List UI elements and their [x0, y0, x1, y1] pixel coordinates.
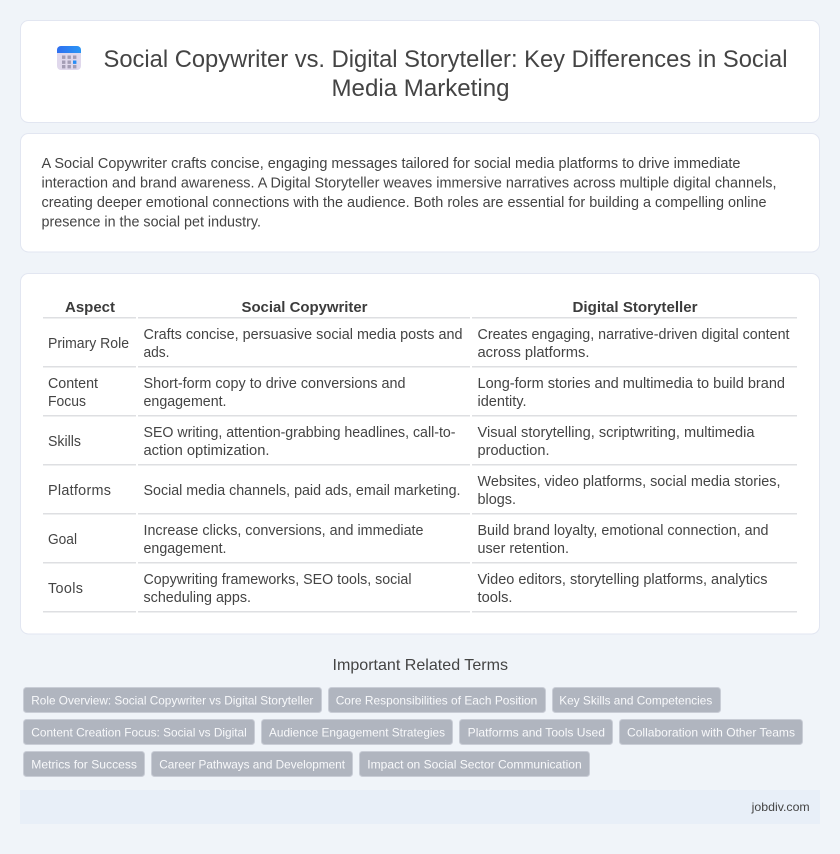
row: goal: Goal [48, 532, 77, 548]
row: primary role [43, 327, 797, 368]
title: Media Marketing [332, 75, 510, 102]
intro text: presence in the social pet industry. [42, 214, 261, 230]
row: goal [43, 523, 797, 564]
row: goal: engagement. [144, 541, 226, 557]
row: content focus: Focus [48, 394, 86, 410]
row: skills: SEO writing, attention-grabbing headlines, call-to- [144, 425, 456, 441]
panel: title header [20, 20, 820, 122]
intro text [42, 156, 776, 230]
table header row: Digital Storyteller [572, 300, 698, 316]
row: tools [43, 572, 797, 612]
row: content focus: Content [48, 376, 98, 392]
row: tools: scheduling apps. [144, 590, 251, 606]
intro text: interaction and brand awareness. A Digital Storyteller weaves immersive narratives across multiple digital channels, [42, 176, 776, 192]
row: tools: tools. [478, 590, 512, 606]
row: primary role: Crafts concise, persuasive social media posts and [144, 327, 462, 343]
related term chips: Career Pathways and Development [159, 757, 346, 771]
row: skills [43, 425, 797, 466]
related term chips: Platforms and Tools Used [468, 725, 605, 739]
row: tools: Tools [48, 581, 83, 597]
row: content focus [43, 376, 797, 416]
row: goal: Build brand loyalty, emotional connection, and [478, 523, 768, 539]
row: content focus: engagement. [144, 394, 226, 410]
footer: jobdiv.com [751, 800, 810, 814]
intro text: A Social Copywriter crafts concise, engaging messages tailored for social media platforms to drive immediate [42, 156, 740, 172]
row: content focus: Long-form stories and multimedia to build brand [478, 376, 785, 392]
row: tools: Video editors, storytelling platforms, analytics [478, 572, 768, 588]
related term chips: Content Creation Focus: Social vs Digital [31, 725, 247, 739]
row: skills: Visual storytelling, scriptwriting, multimedia [478, 425, 754, 441]
icon: calendar [57, 46, 81, 70]
row: content focus: identity. [478, 394, 526, 410]
footer [20, 790, 820, 824]
related term chips: Role Overview: Social Copywriter vs Digital Storyteller [31, 693, 313, 707]
row: primary role: Primary Role [48, 336, 129, 352]
row: platforms: Websites, video platforms, social media stories, [478, 474, 780, 490]
row: goal: user retention. [478, 541, 569, 557]
panel: comparison table [20, 274, 820, 634]
related term chips: Core Responsibilities of Each Position [336, 693, 537, 707]
row: primary role: across platforms. [478, 345, 590, 361]
row: goal: Increase clicks, conversions, and immediate [144, 523, 424, 539]
row: platforms: Platforms [48, 483, 111, 499]
related term chips: Key Skills and Competencies [559, 693, 712, 707]
row: primary role: Creates engaging, narrative-driven digital content [478, 327, 790, 343]
panel: introduction [20, 134, 820, 252]
related term chips: Collaboration with Other Teams [627, 725, 795, 739]
title [104, 46, 788, 102]
row: skills: Skills [48, 434, 81, 450]
title: Social Copywriter vs. Digital Storyteller: Key Differences in Social [104, 46, 788, 73]
row: content focus: Short-form copy to drive conversions and [144, 376, 406, 392]
row: primary role: ads. [144, 345, 170, 361]
table header row: Aspect [65, 300, 115, 316]
row: platforms: blogs. [478, 492, 516, 508]
table header row [43, 300, 797, 318]
row: tools: Copywriting frameworks, SEO tools, social [144, 572, 412, 588]
row: skills: action optimization. [144, 443, 270, 459]
row: skills: production. [478, 443, 550, 459]
heading: important related terms: Important Related Terms [332, 657, 508, 674]
intro text: creating deeper emotional connections with the audience. Both roles are essential for building a compelling online [42, 195, 766, 211]
table header row: Social Copywriter [242, 300, 368, 316]
related term chips [24, 688, 802, 776]
row: platforms: Social media channels, paid ads, email marketing. [144, 483, 460, 499]
related term chips: Metrics for Success [31, 757, 137, 771]
row: platforms [43, 474, 797, 514]
related term chips: Audience Engagement Strategies [269, 725, 445, 739]
related term chips: Impact on Social Sector Communication [367, 757, 582, 771]
